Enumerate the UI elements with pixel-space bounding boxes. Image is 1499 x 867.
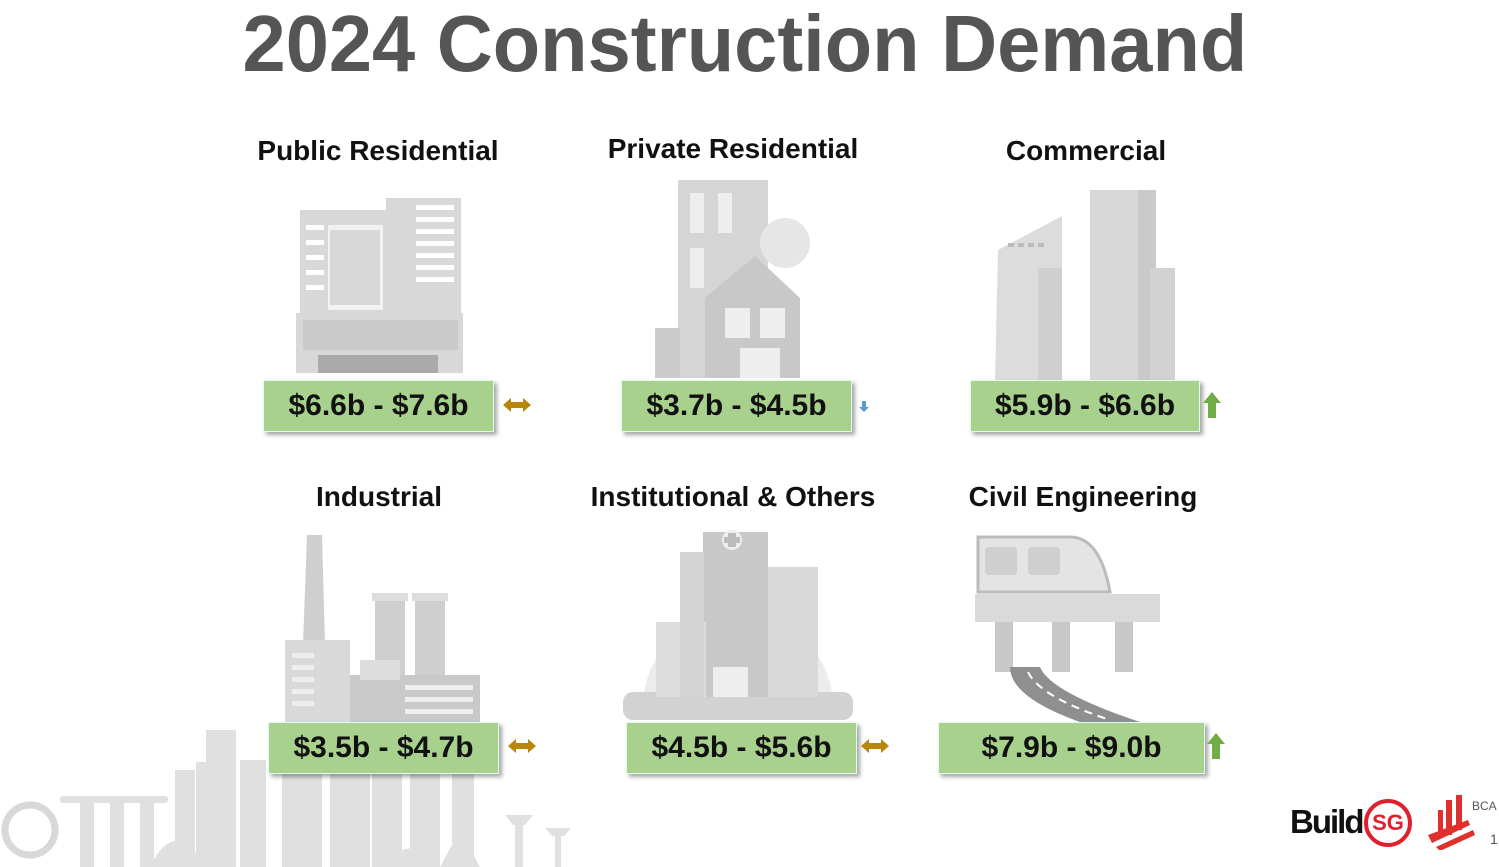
value: Public Residential: $6.6b - $7.6b [288, 389, 469, 422]
value: Industrial: $3.5b - $4.7b [293, 731, 474, 764]
heading: Institutional & Others: Institutional & Others [591, 481, 875, 512]
icon: commercial towers [995, 190, 1175, 380]
arrow: flat industrial [508, 739, 536, 753]
value: Industrial [268, 722, 499, 774]
value: Commercial: $5.9b - $6.6b [995, 389, 1175, 422]
value: Private Residential: $3.7b - $4.5b [646, 389, 827, 422]
icon: hospital [623, 530, 853, 720]
logo: BCA: BCA [1472, 799, 1497, 813]
value: Civil Engineering [938, 722, 1205, 774]
heading: Public Residential: Public Residential [257, 135, 499, 166]
icon: private residential building [655, 180, 810, 378]
heading: Civil Engineering: Civil Engineering [969, 481, 1197, 512]
arrow: flat public residential [503, 398, 531, 412]
logo: BCA [1428, 795, 1498, 850]
value: Private Residential [621, 380, 852, 432]
logo: BuildSG: SG [1372, 810, 1404, 835]
icon: monorail [975, 536, 1160, 722]
icon: public residential building [296, 198, 463, 373]
value: Institutional: $4.5b - $5.6b [651, 731, 832, 764]
arrow: up commercial [1203, 392, 1221, 418]
logo: BuildSG: Build [1290, 803, 1362, 840]
value: Civil Engineering: $7.9b - $9.0b [981, 731, 1162, 764]
arrow: down private residential [859, 401, 869, 412]
logo: BCA: 1 [1490, 831, 1498, 847]
title: 2024 Construction Demand [243, 0, 1247, 88]
arrow: flat institutional [861, 739, 889, 753]
arrow: up civil engineering [1207, 733, 1225, 759]
heading: Private Residential: Private Residential [608, 133, 858, 164]
value: Public Residential [263, 380, 494, 432]
heading: Industrial: Industrial [316, 481, 442, 512]
value: Institutional [626, 722, 857, 774]
logo: BuildSG [1290, 799, 1412, 847]
value: Commercial [970, 380, 1200, 432]
icon: industrial factory [285, 535, 480, 722]
heading: Commercial: Commercial [1006, 135, 1166, 166]
skyline background [2, 730, 571, 867]
